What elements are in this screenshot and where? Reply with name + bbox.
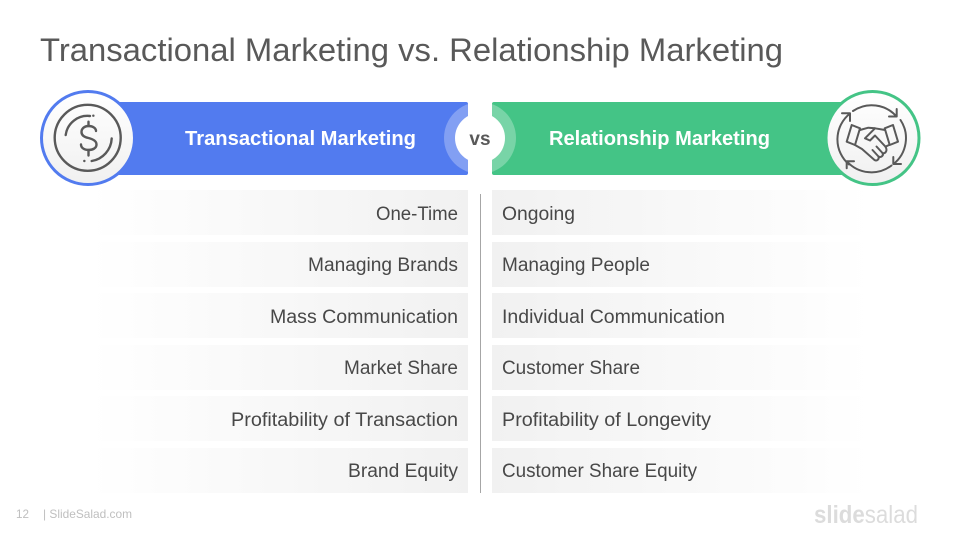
- footer logo: slidesalad: [814, 501, 918, 529]
- footer: page number and site: 12: [16, 507, 29, 521]
- panel: transactional list: Managing Brands: [308, 255, 458, 276]
- panel: transactional list: Market Share: [344, 358, 458, 379]
- title: Transactional Marketing vs. Relationship Marketing: [40, 32, 783, 68]
- panel: relationship list: Individual Communication: [502, 307, 725, 328]
- panel: relationship list: Profitability of Longevity: [502, 410, 712, 431]
- panel: relationship list: Ongoing: [502, 204, 575, 225]
- vs badge: vs: [469, 129, 491, 150]
- panel: relationship list: Managing People: [502, 255, 650, 276]
- panel: transactional list: Mass Communication: [270, 307, 458, 328]
- icon: handshake with cycle arrows: [826, 92, 919, 184]
- panel: transactional list: One-Time: [376, 204, 458, 225]
- panel: relationship list: Customer Share Equity: [502, 461, 697, 482]
- footer: page number and site: | SlideSalad.com: [43, 507, 132, 521]
- panel: transactional list: Brand Equity: [348, 461, 458, 482]
- panel: relationship list: [492, 190, 870, 493]
- blue banner: [88, 102, 468, 175]
- divider: [480, 194, 481, 493]
- panel: transactional marketing header: [42, 92, 468, 184]
- icon: dollar coin: [42, 92, 134, 184]
- panel: relationship list: Customer Share: [502, 358, 640, 379]
- panel: transactional list: Profitability of Transaction: [231, 410, 458, 431]
- panel: relationship marketing header: [492, 92, 919, 184]
- banner heading: Relationship Marketing: [549, 128, 770, 150]
- banner heading: Transactional Marketing: [185, 128, 416, 150]
- panel: transactional list: [90, 190, 468, 493]
- vs badge: [444, 96, 516, 180]
- green banner: [492, 102, 872, 175]
